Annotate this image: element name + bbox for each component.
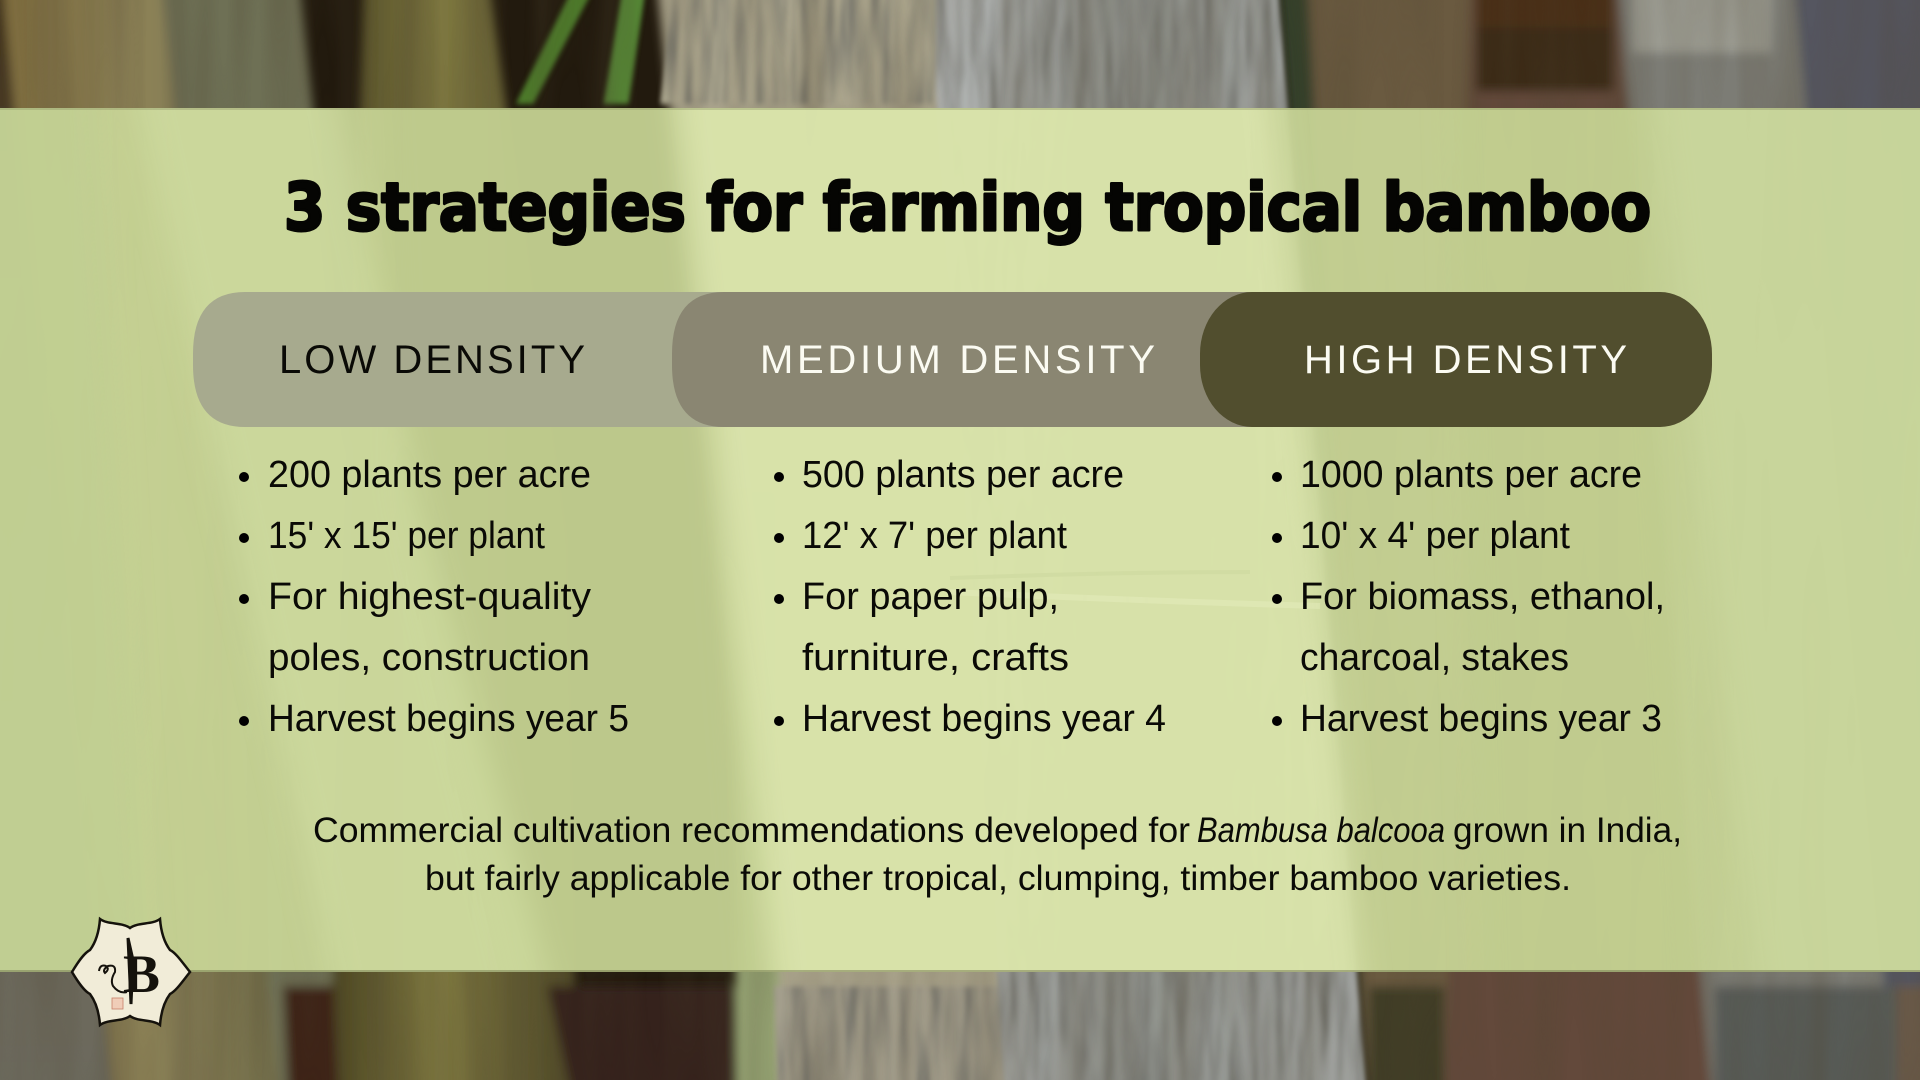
list: medium density: For paper pulp,	[802, 576, 1059, 618]
pill: medium density	[672, 292, 1255, 427]
list: high density: 1000 plants per acre	[1300, 454, 1642, 496]
list: low density	[239, 454, 629, 740]
list: high density: Harvest begins year 3	[1300, 698, 1662, 740]
icon: lotus logo badge	[72, 919, 190, 1025]
icon: lotus logo badge: B	[123, 944, 160, 1004]
pill: low density: LOW DENSITY	[279, 338, 585, 382]
pill: high density: HIGH DENSITY	[1304, 338, 1627, 382]
footnote text: Commercial cultivation recommendations developed for	[313, 811, 1190, 850]
footnote text: Bambusa balcooa	[1197, 811, 1445, 850]
list: medium density: Harvest begins year 4	[802, 698, 1166, 740]
footnote text	[313, 811, 1682, 898]
list: medium density: 500 plants per acre	[802, 454, 1124, 496]
list: medium density: 12' x 7' per plant	[802, 515, 1067, 557]
list: high density: For biomass, ethanol,	[1300, 576, 1665, 618]
list: low density: Harvest begins year 5	[268, 698, 629, 740]
list: medium density	[774, 454, 1166, 740]
list: high density: charcoal, stakes	[1300, 637, 1569, 679]
pill: high density	[1200, 292, 1712, 427]
list: low density: For highest-quality	[268, 576, 591, 618]
list: medium density: furniture, crafts	[802, 637, 1069, 679]
list: high density: 10' x 4' per plant	[1300, 515, 1570, 557]
list: low density: 15' x 15' per plant	[268, 515, 545, 557]
footnote text: but fairly applicable for other tropical, clumping, timber bamboo varieties.	[425, 859, 1571, 898]
title: 3 strategies for farming tropical bamboo	[284, 169, 1651, 246]
pill: medium density: MEDIUM DENSITY	[760, 338, 1155, 382]
list: low density: poles, construction	[268, 637, 590, 679]
footnote text: grown in India,	[1453, 811, 1682, 850]
density header pills	[193, 292, 1712, 427]
list: low density: 200 plants per acre	[268, 454, 591, 496]
pill: low density	[193, 292, 740, 427]
list: high density	[1272, 454, 1665, 740]
